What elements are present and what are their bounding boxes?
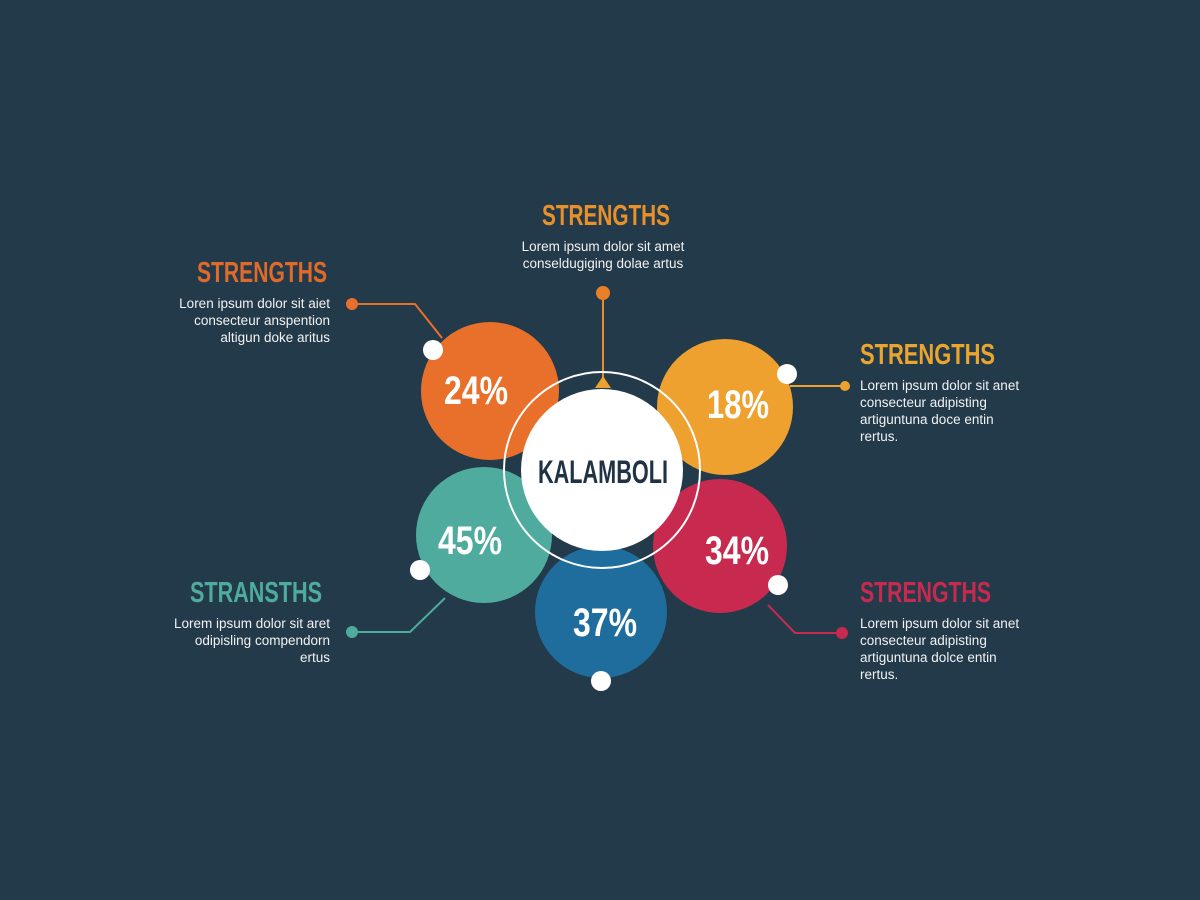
petal: yellow 18% bbox=[657, 339, 797, 475]
text block: right top: Lorem ipsum dolor sit anet bbox=[860, 378, 1019, 393]
center hub bbox=[504, 372, 700, 568]
connector: left bottom bbox=[347, 598, 445, 637]
text block: right top: STRENGTHS bbox=[860, 339, 995, 371]
text block: top: conseldugiging dolae artus bbox=[523, 256, 684, 271]
text block: right top: rertus. bbox=[860, 429, 898, 444]
petal: red 34% bbox=[653, 479, 788, 613]
petal: teal 45% bbox=[410, 467, 552, 603]
petal: blue 37% bbox=[535, 546, 667, 691]
petal: teal 45%: 45% bbox=[438, 519, 502, 563]
petal: orange 24%: 24% bbox=[444, 369, 508, 413]
text block: right top: consecteur adipisting bbox=[860, 395, 987, 410]
text block: left top: consecteur anspention bbox=[194, 313, 330, 328]
connector: right top bbox=[790, 381, 850, 391]
text block: left bottom: ertus bbox=[300, 650, 330, 665]
petal: orange 24% bbox=[421, 322, 559, 460]
text block: left top bbox=[179, 257, 330, 345]
connector: left top bbox=[347, 299, 442, 338]
text block: left top: Loren ipsum dolor sit aiet bbox=[179, 296, 330, 311]
text block: right bottom: artiguntuna dolce entin bbox=[860, 650, 997, 665]
text block: left bottom bbox=[174, 577, 330, 665]
text block: top: STRENGTHS bbox=[542, 200, 670, 232]
connector: top bbox=[595, 286, 611, 388]
text block: right bottom: Lorem ipsum dolor sit anet bbox=[860, 616, 1019, 631]
text block: right bottom: rertus. bbox=[860, 667, 898, 682]
petal: blue 37%: 37% bbox=[573, 601, 637, 645]
text block: right bottom: consecteur adipisting bbox=[860, 633, 987, 648]
text block: left bottom: Lorem ipsum dolor sit aret bbox=[174, 616, 330, 631]
petal: red 34%: 34% bbox=[705, 529, 769, 573]
text block: top bbox=[522, 200, 685, 271]
text block: top: Lorem ipsum dolor sit amet bbox=[522, 239, 685, 254]
text block: right bottom bbox=[860, 577, 1019, 682]
text block: left bottom: odipisling compendorn bbox=[195, 633, 330, 648]
text block: left top: STRENGTHS bbox=[197, 257, 327, 289]
text block: right top bbox=[860, 339, 1019, 444]
text block: right top: artiguntuna doce entin bbox=[860, 412, 994, 427]
petal: yellow 18%: 18% bbox=[707, 383, 769, 427]
text block: right bottom: STRENGTHS bbox=[860, 577, 991, 609]
connector: right bottom bbox=[768, 605, 847, 638]
text block: left top: altigun doke aritus bbox=[220, 330, 330, 345]
text block: left bottom: STRANSTHS bbox=[190, 577, 322, 609]
center hub: KALAMBOLI bbox=[538, 454, 668, 490]
